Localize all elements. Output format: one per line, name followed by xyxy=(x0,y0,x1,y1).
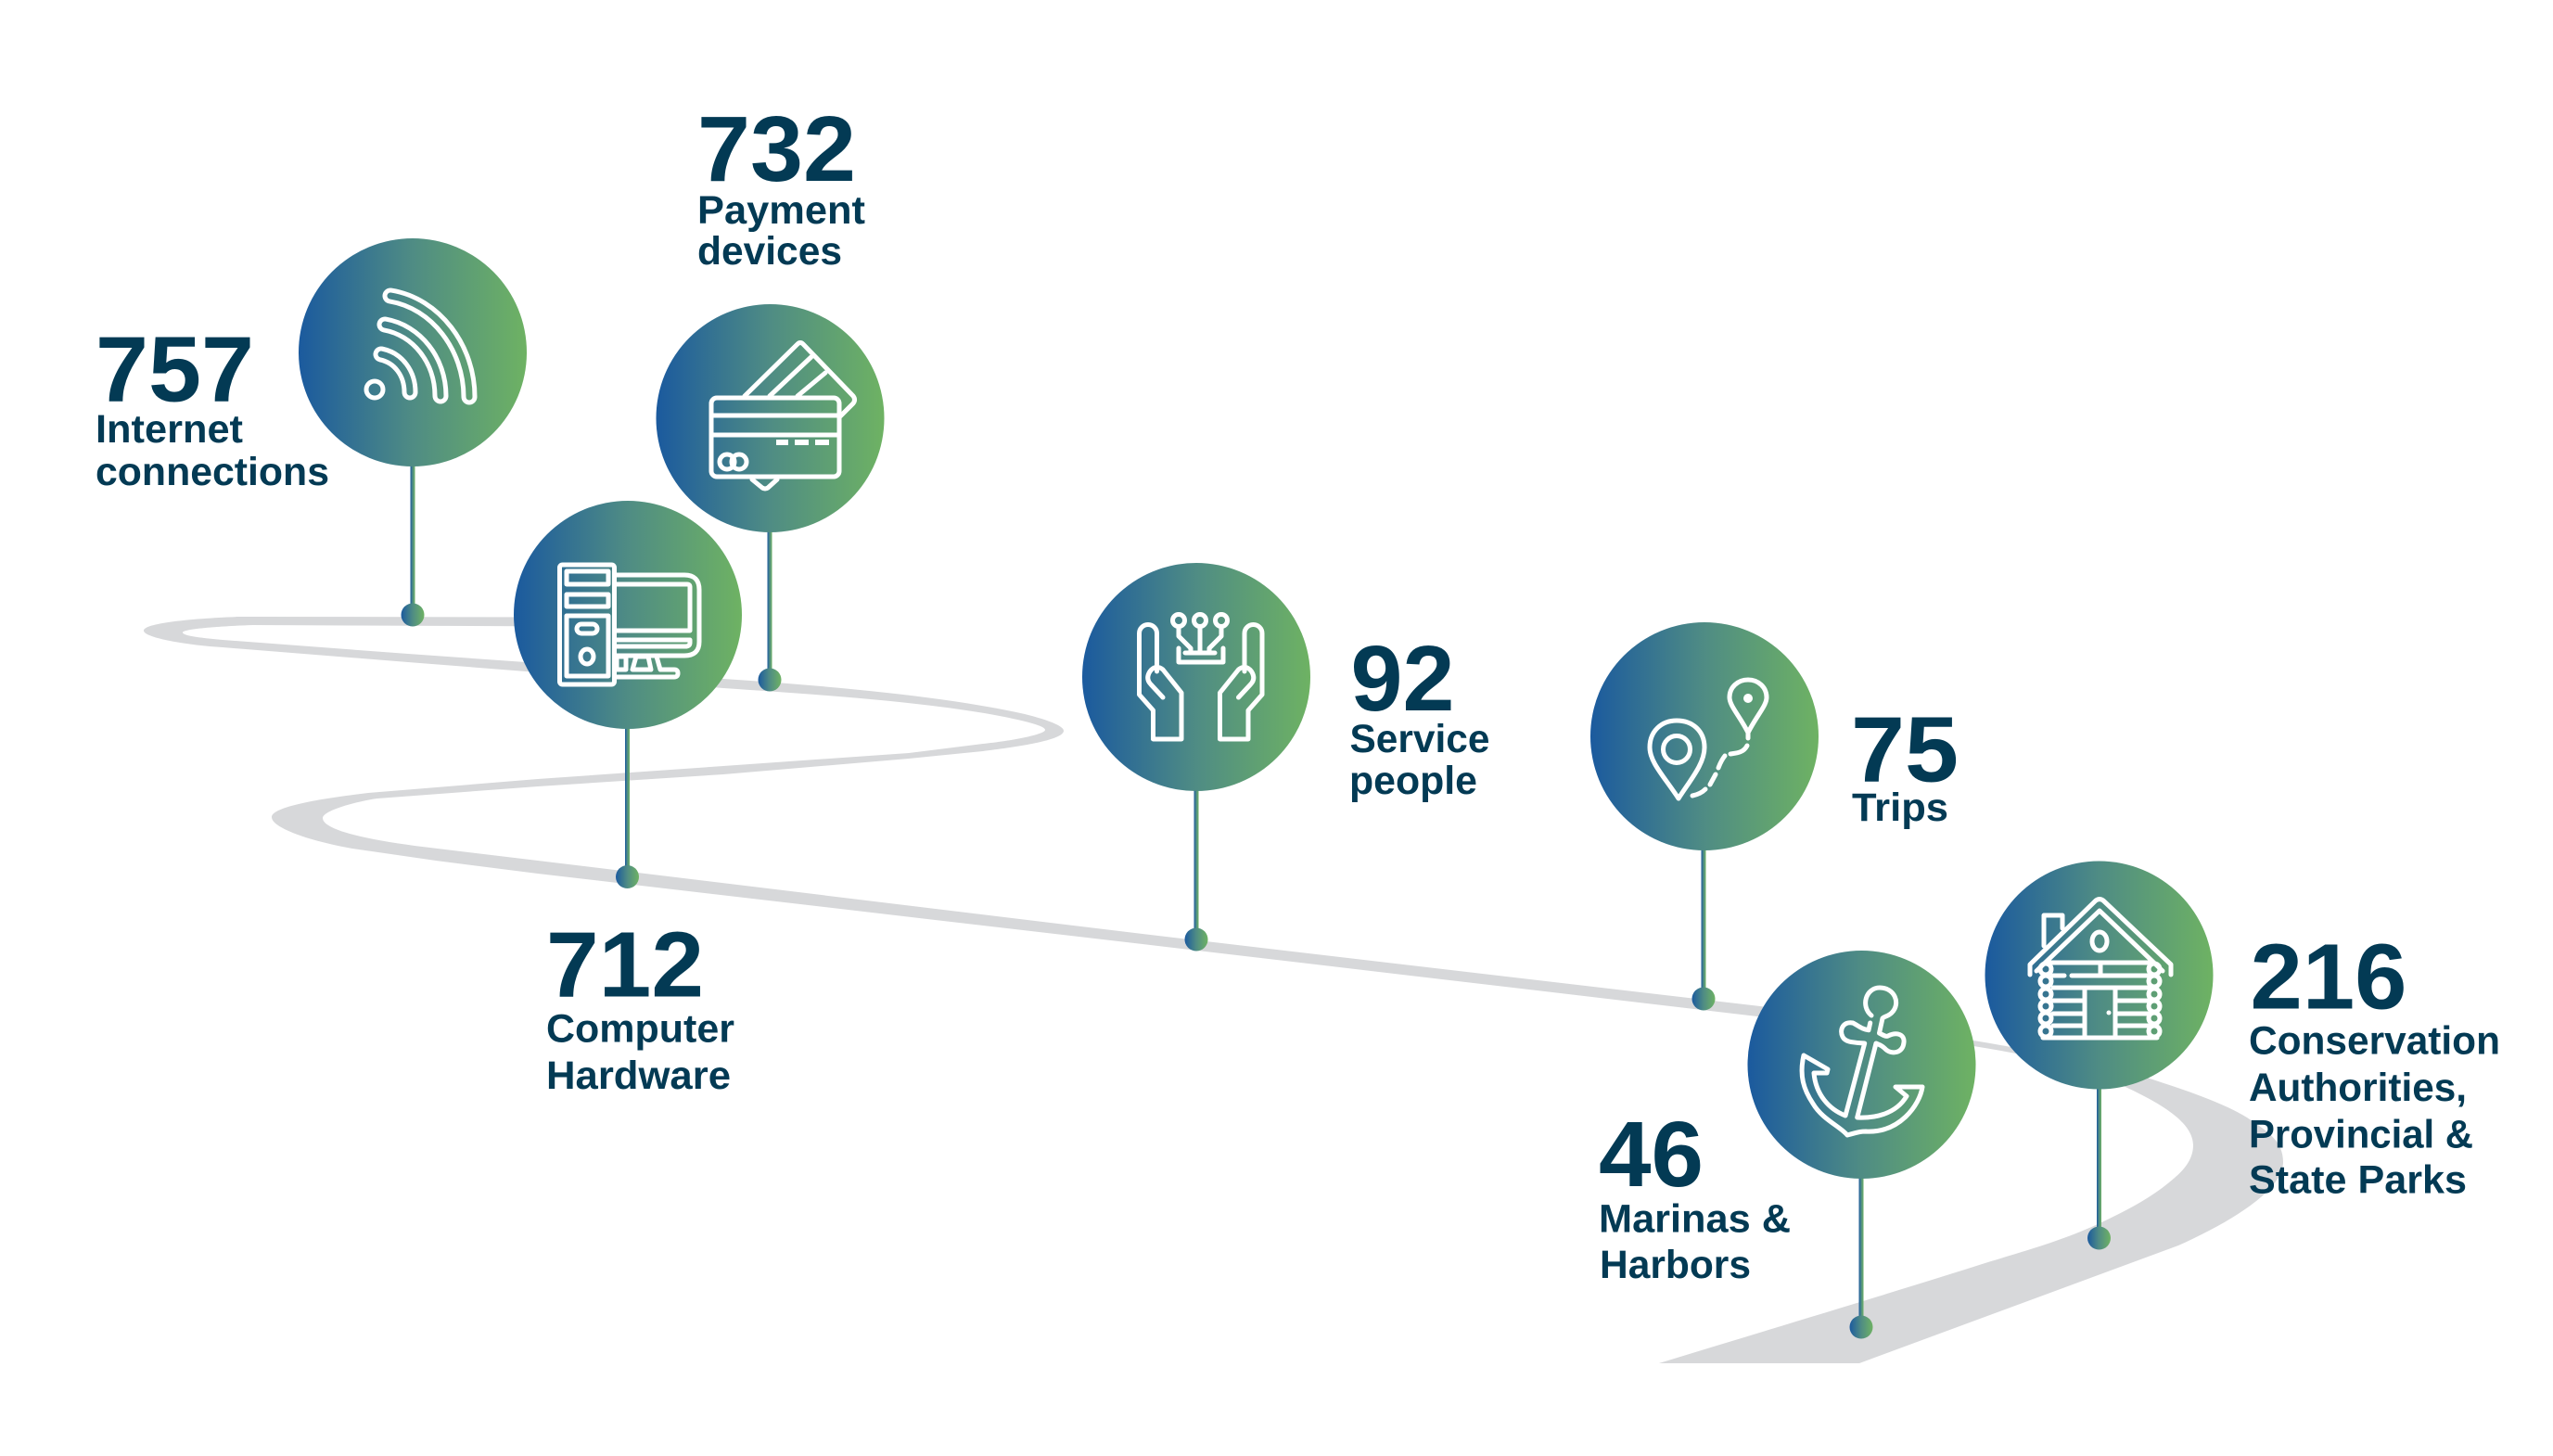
icon: credit cards xyxy=(711,343,855,489)
label: Internet xyxy=(96,407,243,452)
value: 757 xyxy=(96,318,254,422)
badge circle xyxy=(1082,563,1310,791)
label line 2: Hardware xyxy=(546,1054,731,1098)
label: Computer xyxy=(546,1007,734,1052)
label: Marinas & xyxy=(1599,1197,1791,1242)
label line 2: Harbors xyxy=(1600,1243,1751,1287)
milestone: 92 Service people xyxy=(1082,563,1489,952)
stem xyxy=(1858,1176,1864,1327)
badge circle xyxy=(299,238,527,466)
milestone: 712 Computer Hardware xyxy=(514,501,742,1098)
road marker dot xyxy=(1185,927,1207,952)
label line 2: connections xyxy=(96,450,329,494)
label: Service xyxy=(1350,717,1489,761)
badge circle xyxy=(1985,861,2213,1089)
label line 3: Provincial & xyxy=(2249,1113,2473,1157)
value: 732 xyxy=(697,97,856,201)
milestone: 216 Conservation Authorities, Provincial & State Parks xyxy=(1985,861,2500,1250)
milestone: 75 Trips xyxy=(1590,622,1959,1011)
value: 46 xyxy=(1599,1103,1704,1207)
badge circle xyxy=(657,304,885,532)
road marker dot xyxy=(616,865,639,888)
label: Trips xyxy=(1852,785,1948,830)
road marker dot xyxy=(1691,987,1716,1011)
value: 75 xyxy=(1851,698,1959,802)
value: 92 xyxy=(1350,627,1454,731)
milestone: 732 Payment devices xyxy=(657,97,885,692)
winding grey road xyxy=(144,617,2283,1363)
label: Payment xyxy=(697,188,865,233)
stem xyxy=(2097,1086,2101,1238)
badge circle xyxy=(1590,622,1819,850)
milestone: 757 Internet connections xyxy=(96,238,527,627)
milestone: 46 Marinas & Harbors xyxy=(1599,951,1975,1339)
icon: wifi xyxy=(366,296,469,398)
icon: log cabin xyxy=(2030,900,2171,1038)
icon: desktop computer xyxy=(560,565,699,684)
stem xyxy=(625,726,630,876)
value: 216 xyxy=(2250,926,2407,1029)
value: 712 xyxy=(546,913,704,1017)
stem xyxy=(768,529,772,680)
icon: route with map pins xyxy=(1650,680,1767,798)
road marker dot xyxy=(2087,1226,2111,1250)
label line 2: Authorities, xyxy=(2249,1066,2467,1110)
icon: anchor xyxy=(1802,988,1922,1135)
stem xyxy=(1194,788,1198,939)
label: Conservation xyxy=(2249,1018,2500,1063)
stem xyxy=(410,464,415,615)
badge circle xyxy=(514,501,742,729)
label line 4: State Parks xyxy=(2249,1157,2467,1202)
road marker dot xyxy=(1849,1315,1873,1339)
road marker dot xyxy=(401,603,425,627)
label line 2: people xyxy=(1349,759,1477,803)
icon: hands holding circuit xyxy=(1139,614,1262,739)
badge circle xyxy=(1747,951,1975,1179)
road marker dot xyxy=(759,668,781,692)
stem xyxy=(1701,848,1706,999)
label line 2: devices xyxy=(697,229,842,274)
